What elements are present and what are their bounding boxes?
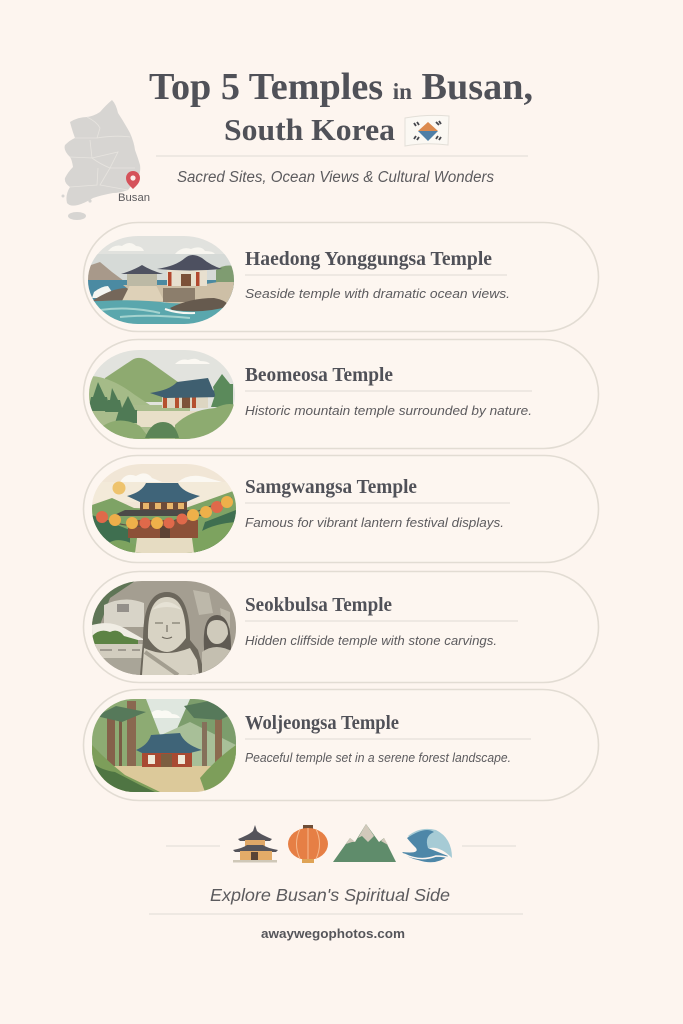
scene: seaside temple (88, 236, 234, 324)
panel: Beomeosa Temple (84, 340, 598, 448)
title (149, 66, 533, 147)
description: Famous for vibrant lantern festival displays. (245, 516, 504, 530)
panel: Samgwangsa Temple (84, 456, 598, 562)
icon: South Korean flag (405, 115, 449, 146)
footer tagline: Explore Busan's Spiritual Side (210, 885, 450, 905)
title: South Korea (224, 112, 396, 147)
description: Seaside temple with dramatic ocean views. (245, 287, 510, 301)
map of South Korea with Busan pin (62, 100, 150, 220)
scene: stone carvings (92, 581, 236, 675)
scene: mountain temple (88, 350, 235, 439)
icon: lantern (288, 825, 328, 863)
panel: Seokbulsa Temple (84, 572, 598, 682)
title: Top 5 Temples in Busan, (149, 66, 533, 108)
description: Peaceful temple set in a serene forest landscape. (245, 751, 511, 765)
scene: lantern festival temple (92, 464, 236, 553)
heading: Beomeosa Temple (245, 364, 393, 386)
subtitle: Sacred Sites, Ocean Views & Cultural Wonders (177, 169, 494, 186)
icon: wave (402, 829, 452, 862)
panel: Woljeongsa Temple (84, 690, 598, 800)
scene: forest temple (92, 699, 236, 792)
heading: Haedong Yonggungsa Temple (245, 248, 492, 270)
description: Historic mountain temple surrounded by nature. (245, 404, 532, 418)
map of South Korea with Busan pin: Busan (118, 192, 150, 204)
website: awaywegophotos.com (261, 926, 405, 941)
heading: Seokbulsa Temple (245, 594, 392, 616)
icon: Busan map pin (126, 171, 140, 189)
heading: Woljeongsa Temple (245, 712, 399, 734)
icon: pagoda (233, 825, 278, 862)
heading: Samgwangsa Temple (245, 476, 417, 498)
panel: Haedong Yonggungsa Temple (84, 222, 598, 332)
description: Hidden cliffside temple with stone carvings. (245, 634, 497, 648)
icon: mountains (333, 824, 396, 862)
